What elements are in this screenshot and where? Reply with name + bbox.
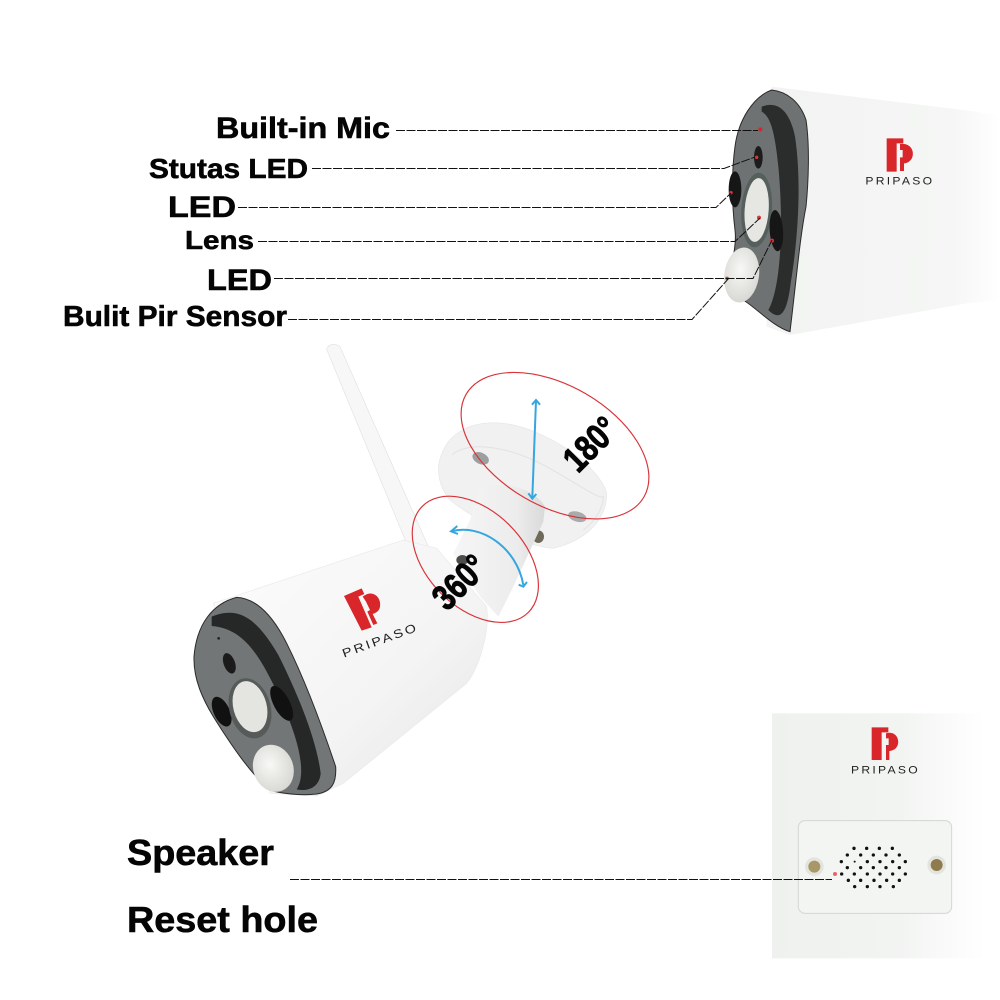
panel: top-right camera front view: [721, 87, 1000, 335]
label: Reset hole: Reset hole: [127, 899, 318, 940]
left LED: [729, 171, 741, 207]
status LED: [754, 146, 763, 169]
arm joint: [453, 485, 545, 617]
leader line: LED left: [238, 193, 731, 208]
180 degree range ellipse: [436, 342, 674, 549]
label: LED left: LED: [168, 191, 236, 224]
panel: speaker close-up: [772, 713, 985, 958]
leader line: Stutas LED: [312, 157, 755, 168]
right LED: [266, 683, 298, 724]
speaker plate: [798, 821, 952, 913]
arrow: 360 degree rotation: [451, 526, 527, 587]
logo: Pripaso: [340, 588, 420, 660]
label: LED right: LED: [207, 264, 272, 297]
label: Speaker: Speaker: [127, 832, 274, 873]
leader line: Lens: [258, 218, 760, 242]
PIR sensor dome: [721, 245, 763, 305]
360 degree range ellipse: [388, 472, 563, 647]
status LED: [220, 651, 238, 675]
red marker dots: [725, 156, 774, 280]
joint screw: [456, 555, 468, 565]
antenna: [327, 344, 428, 547]
mount inner top: [452, 447, 603, 530]
label: Built-in Mic: Built-in Mic: [216, 112, 390, 145]
reset hole marker: [833, 872, 837, 876]
leader line: Bulit Pir Sensor: [288, 278, 729, 320]
panel background: [772, 713, 985, 958]
label: Bulit Pir Sensor: Bulit Pir Sensor: [63, 301, 287, 333]
leader line: Reset hole: [290, 878, 832, 880]
mount holes: [470, 450, 588, 524]
right LED: [768, 210, 784, 252]
lens: [222, 673, 278, 743]
logo: Pripaso: PRIPASO: [340, 620, 420, 660]
camera body: [213, 540, 487, 796]
leader line: Built-in Mic: [396, 130, 758, 132]
panel: main camera with bracket: [194, 342, 674, 798]
label: Lens: Lens: [185, 225, 254, 255]
dark ring groove: [762, 105, 799, 315]
left screw: [805, 857, 824, 876]
logo: Pripaso: PRIPASO: [865, 176, 934, 188]
mount screw: [533, 530, 544, 543]
dark ring groove: [212, 613, 321, 790]
speaker holes: [840, 847, 907, 888]
rotation label 360: 360°: [424, 546, 495, 618]
camera face plate: [728, 90, 808, 332]
camera body: [767, 87, 1000, 335]
logo: Pripaso: [865, 138, 934, 188]
camera face plate: [194, 597, 336, 795]
mic dot: [217, 637, 220, 640]
rotation label 180: 180°: [555, 408, 626, 480]
arrow: 180 degree tilt: [528, 400, 540, 499]
wall mount disk: [438, 423, 607, 548]
PIR sensor dome: [246, 739, 300, 798]
logo: Pripaso: PRIPASO: [851, 764, 920, 776]
left LED: [208, 694, 236, 730]
logo: Pripaso: [851, 727, 920, 776]
mic dot: [758, 127, 762, 131]
label: Stutas LED: Stutas LED: [149, 153, 308, 184]
lens: [739, 172, 775, 248]
leader line: LED right: [274, 240, 772, 278]
right screw: [927, 856, 946, 874]
